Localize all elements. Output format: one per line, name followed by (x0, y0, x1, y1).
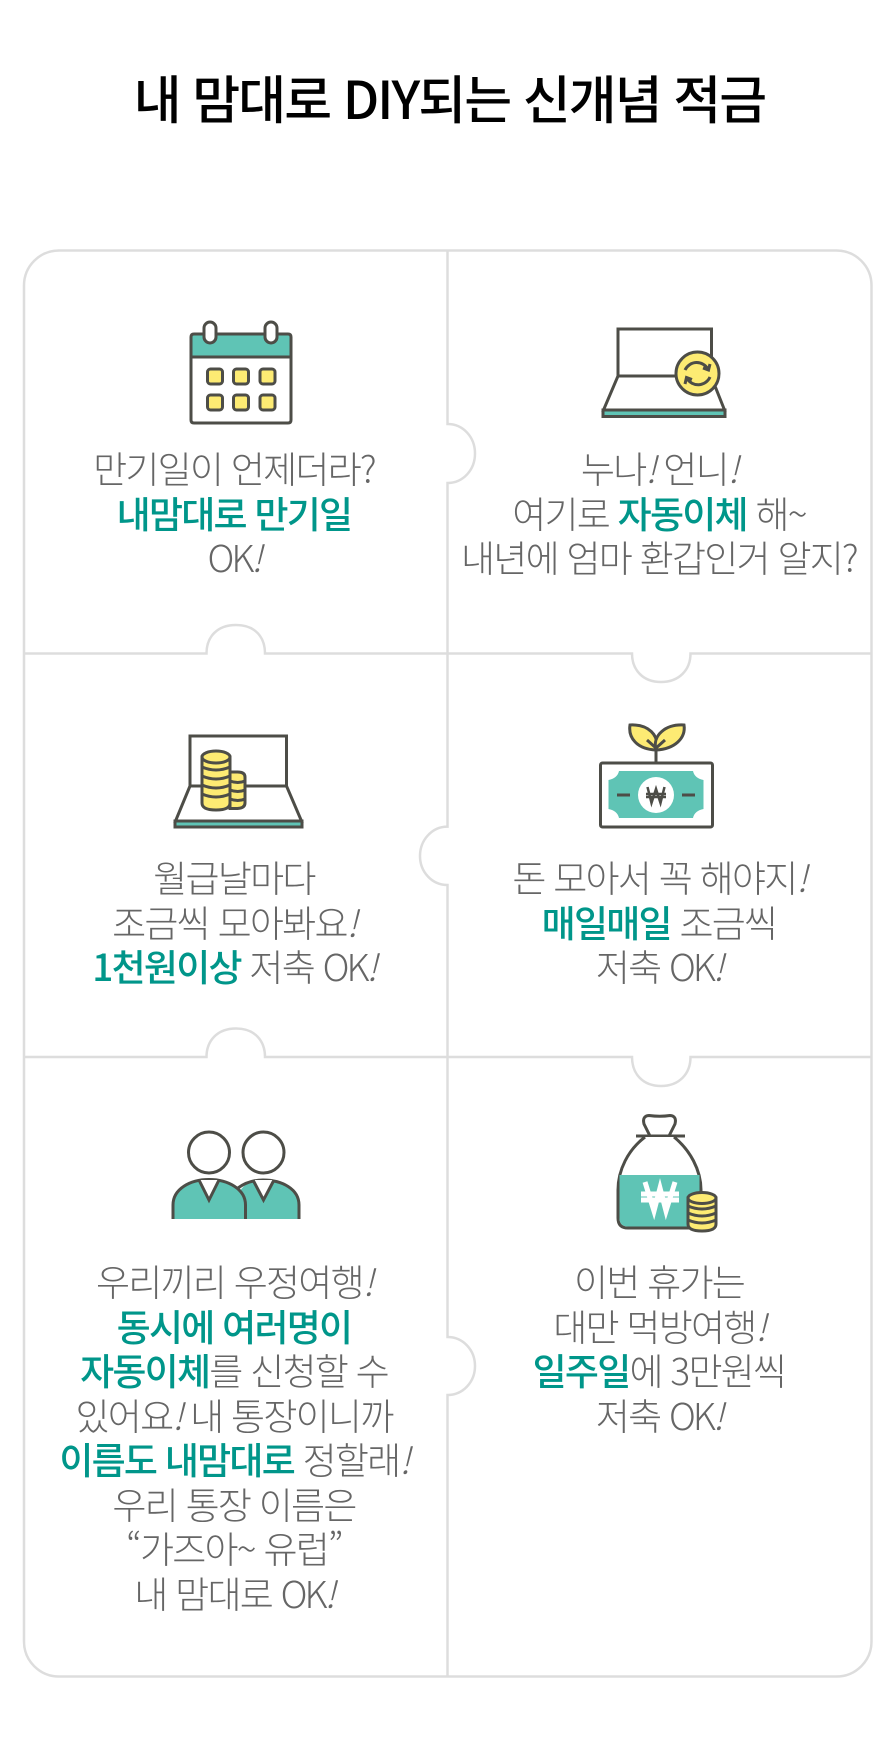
panel 4 text: 돈 모아서 꼭 해야지! (512, 849, 806, 903)
panel 4 text: 저축 OK! (596, 938, 722, 992)
panel 1 text (93, 440, 375, 583)
panel 3 text: 월급날마다 (153, 849, 315, 903)
panel 1 text: 만기일이 언제더라? (93, 440, 375, 494)
panel 2 text: 누나! 언니! (581, 440, 737, 494)
panel 5 text: 있어요! 내 통장이니까 (75, 1386, 392, 1440)
panel 2 text (461, 440, 857, 583)
panel 6 text: 저축 OK! (596, 1386, 722, 1440)
panel 5 text: 동시에 여러명이 (117, 1298, 351, 1352)
panel 1 text: 내맘대로 만기일 (117, 484, 351, 538)
panel 5 text (59, 1253, 413, 1618)
panel 5 text: 이름도 내맘대로 정할래! (59, 1431, 409, 1485)
panel 6 text: 일주일에 3만원씩 (533, 1342, 785, 1396)
panel 5 text: 내 맘대로 OK! (134, 1564, 334, 1618)
panel 2 text: 여기로 자동이체 해~ (512, 484, 806, 538)
panel 5 text: 자동이체를 신청할 수 (80, 1342, 388, 1396)
panel 3 text: 1천원이상 저축 OK! (92, 938, 376, 992)
panel 4 text (512, 849, 810, 992)
panel 6 text: 대만 먹방여행! (553, 1298, 765, 1352)
panel 5 text: 우리 통장 이름은 (112, 1476, 356, 1530)
panel 5 text: 우리끼리 우정여행! (96, 1253, 372, 1307)
panel 2 text: 내년에 엄마 환갑인거 알지? (461, 529, 857, 583)
panel 6 text: 이번 휴가는 (574, 1253, 744, 1307)
title: 내 맘대로 DIY되는 신개념 적금 (134, 59, 765, 134)
panel 3 text: 조금씩 모아봐요! (112, 894, 356, 948)
panel 5 text: “가즈아~ 유럽” (126, 1520, 342, 1574)
panel 4 text: 매일매일 조금씩 (542, 894, 776, 948)
panel 1 text: OK! (207, 529, 261, 583)
panel 3 text (92, 849, 380, 992)
panel 6 text (533, 1253, 785, 1440)
